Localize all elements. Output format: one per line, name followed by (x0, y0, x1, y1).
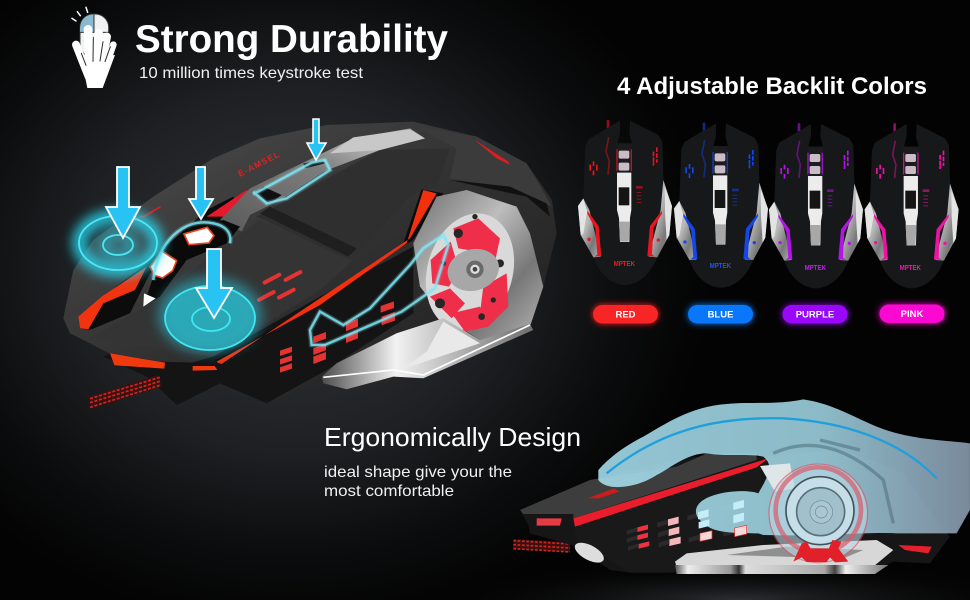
mouse silhouette (520, 450, 950, 573)
side button grid (280, 301, 395, 373)
pill: blue (688, 305, 753, 324)
heading: Ergonomically Design: Ergonomically Design (324, 422, 581, 452)
silver base (675, 540, 893, 574)
DPI buttons (256, 269, 303, 303)
heading: backlit colors: 4 Adjustable Backlit Colors (617, 73, 927, 100)
mouse: red (578, 120, 672, 285)
pill: red: RED (615, 310, 636, 320)
arrow: center click (196, 249, 232, 318)
main mouse illustration (63, 122, 557, 407)
icon: hand clicking mouse (72, 7, 115, 88)
badge (572, 539, 607, 567)
body text: ideal shape (324, 464, 512, 500)
click glows and arrows (79, 119, 326, 353)
center silver spine (220, 128, 425, 232)
pill: red (593, 305, 658, 324)
mouse: purple (769, 123, 863, 288)
palm panel (257, 148, 450, 260)
red edge trim (215, 189, 443, 367)
red trim (573, 458, 768, 527)
pill: blue: BLUE (708, 310, 733, 320)
rear panel (413, 126, 552, 207)
mouse body (63, 122, 557, 405)
right button panel (90, 220, 353, 357)
silver base plate (322, 318, 533, 389)
cable (513, 541, 570, 552)
pill: purple (782, 305, 848, 324)
body text: ideal shape: ideal shape give your the (324, 464, 512, 481)
silver wheel housing (413, 190, 543, 340)
side mouse with hand (513, 399, 970, 574)
arrow: wheel (189, 167, 213, 219)
glow: center click disc (158, 277, 262, 353)
top nose (520, 453, 757, 518)
side button grid (637, 525, 649, 549)
ring: center click (165, 286, 255, 350)
mouse: pink (865, 123, 959, 288)
glow: left click ring (79, 216, 157, 270)
light buttons through the hand (698, 500, 744, 529)
side panel (573, 465, 764, 573)
body text: ideal shape: most comfortable (324, 483, 454, 500)
hand over mouse (598, 399, 970, 535)
scroll and side glow path (153, 160, 448, 345)
mouse: red: MPTEK (614, 261, 635, 268)
button logos (128, 140, 510, 225)
camo wheel (413, 203, 527, 340)
side panel (153, 247, 413, 405)
ring: left click (79, 216, 157, 270)
pill: purple: PURPLE (796, 310, 834, 320)
backlit mice row (578, 120, 959, 288)
wheel (769, 464, 868, 563)
rear red trim (898, 545, 932, 553)
pill: pink (880, 304, 944, 323)
front bumper (103, 353, 267, 405)
left button red strip (78, 197, 240, 330)
mouse: blue: MPTEK (710, 263, 731, 270)
arrow: DPI (307, 119, 326, 160)
silver shoulder (760, 463, 795, 492)
cable (90, 377, 160, 407)
button logos: E-AMSEL (236, 149, 282, 179)
mouse: purple: MPTEK (805, 265, 826, 272)
title: Strong Durability: Strong Durability (135, 18, 448, 61)
pill: pink: PINK (901, 309, 923, 320)
subtitle: keystroke test: 10 million times keystroke test (139, 65, 364, 82)
scroll wheel with white keys (143, 220, 240, 307)
color pills (593, 304, 944, 324)
mouse: pink: MPTEK (900, 265, 921, 272)
mouse: blue (674, 123, 768, 288)
arrow: left click (106, 167, 140, 238)
